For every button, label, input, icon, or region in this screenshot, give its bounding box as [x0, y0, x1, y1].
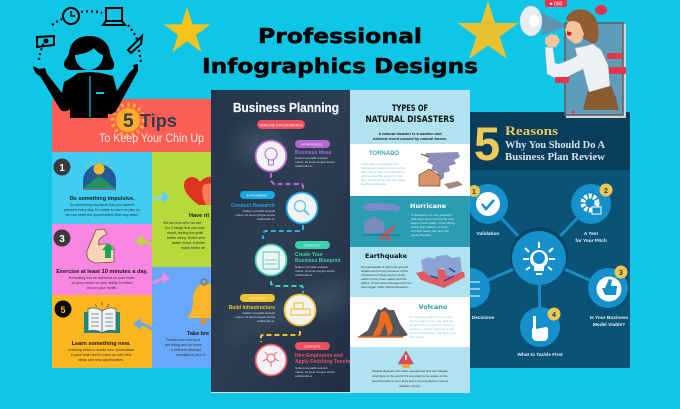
step 2: conduct research: IN PROGRESS: [247, 194, 267, 198]
step 1: business ideas: Nullam convallis suscipit: [295, 156, 328, 160]
title: Professional: [258, 24, 422, 48]
tip 1: [52, 152, 152, 224]
tip 1: Do something impulsive that you haven't: [70, 203, 134, 207]
heading: 5 tips: To Keep Your Chin Up: [99, 133, 204, 145]
section: earthquake: Earthquake: [365, 252, 408, 260]
section: tornado: dangerous rotating column of air: [361, 166, 405, 170]
reason 2: test for pitch: for Your Pitch: [575, 238, 607, 244]
reason 2: test for pitch: [571, 184, 612, 244]
illustration: woman with megaphone on phone: [520, 0, 626, 118]
tip 1: planned every day. It's better to have no plan so: [64, 208, 140, 212]
step 3: business blueprint: Nullam convallis suscipit: [295, 265, 328, 269]
tip 1: Do something impulsive.: [69, 196, 135, 202]
step 3: business blueprint: metus, sit amet congue lectus: [295, 269, 335, 273]
step 4: build infrastructure: metus, sit amet congue lectus: [235, 315, 275, 319]
step 4: build infrastructure: Nullam convallis suscipit: [242, 311, 275, 315]
reason 3: model viable: Model Viable?: [593, 322, 625, 328]
section: hurricane: Hurricane: [410, 202, 447, 210]
step 2: conduct research: Nullam convallis suscipit: [242, 209, 275, 213]
section: earthquake: also trigger other natural disasters.: [361, 285, 409, 289]
section: earthquake: plates. It can cause damage and can: [361, 281, 412, 285]
reason 3: model viable: Is Your Business: [590, 315, 629, 321]
icon: warning sign: [398, 351, 414, 368]
step 1: business ideas: metus, sit amet congue lectus: [295, 160, 335, 164]
heading: 5 reasons: Business Plan Review: [505, 152, 605, 163]
heading: 5 reasons: Reasons: [505, 123, 558, 138]
reason 3: model viable: [588, 266, 629, 328]
heading: 5 tips: Tips: [140, 111, 177, 131]
tip 3: on your mood, on your ability to reflect: [72, 281, 132, 285]
tip 2: make better de: [181, 246, 205, 250]
reason 5: decisions: Decisions: [472, 315, 495, 321]
section: hurricane: A hurricane is a very powerful: [411, 213, 452, 217]
tip 5: [52, 295, 152, 368]
tip 4: Prevent burnout by st: [166, 338, 200, 342]
section: earthquake: movement of large pieces of the: [361, 273, 405, 277]
section: volcano: An volcano eruption is an event: [409, 315, 452, 319]
step 5: hire employees: Hire Employees and: [295, 353, 343, 359]
tip 5: 5: [60, 305, 66, 315]
closing note: [372, 369, 448, 388]
step 1: business ideas: [256, 140, 335, 172]
section: hurricane: cause flooding.: [411, 233, 432, 237]
reason 4: what to tackle first: What to Tackle First: [517, 352, 563, 358]
section: tornado: and touches the ground. It has: [361, 174, 403, 178]
step 5: hire employees: sollicitudin et.: [295, 374, 313, 378]
tip 2: Do 3 things that you love: [165, 226, 205, 230]
step 4: build infrastructure: sollicitudin et.: [257, 319, 275, 323]
tip 5: ideas and new opportunities.: [78, 358, 124, 362]
section: tornado: that comes from a thunderstorm: [361, 170, 405, 174]
step 5: hire employees: COMPLETE: [304, 344, 320, 348]
reason 1: validation: [468, 184, 508, 237]
reason 2: test for pitch: 2: [604, 188, 608, 195]
tip 4: a different atmospl: [171, 348, 201, 352]
tip 2: We are less who we are: [163, 221, 201, 225]
step 4: build infrastructure: COMPLETE: [249, 296, 265, 300]
step 2: conduct research: [231, 191, 318, 224]
heading: 5 tips: 5: [123, 111, 134, 132]
tip 2: Have rit: [189, 213, 209, 219]
step 5: hire employees: Apply Finishing Touches: [295, 359, 354, 365]
hub: lightbulb: [510, 227, 568, 285]
tip 2: result, feeling the gratif: [167, 231, 203, 235]
section: volcano: Volcano: [419, 303, 448, 311]
tip 4: novelties in your d: [176, 353, 205, 357]
timeline label: [257, 120, 305, 129]
section: volcano: escapes from a volcano. When a: [409, 323, 454, 327]
heading: A natural disaster is a sudden and: [378, 131, 442, 136]
tip 3: Exercising has an influence on your brain,: [69, 276, 135, 280]
timeline label: TIMELINE INFOGRAPHICS: [259, 124, 304, 128]
reason 1: validation: Validation: [477, 231, 499, 237]
tip 3: and on your health.: [87, 286, 117, 290]
step 2: conduct research: Conduct Research: [231, 203, 275, 209]
section: volcano: where molten rock, ash, and gas: [409, 319, 454, 323]
section: earthquake: [361, 252, 465, 289]
tip 2: better mood. A better: [172, 241, 206, 245]
section: tornado: A tornado is a powerful and: [361, 162, 399, 166]
tip 4: are doing and do some: [165, 343, 202, 347]
step 5: hire employees: metus, sit amet congue lectus: [295, 370, 335, 374]
panel: 5 tips: [52, 99, 218, 368]
tip 2: better sleep. Better slee: [167, 236, 205, 240]
section: tornado: TORNADO: [369, 151, 399, 157]
step 2: conduct research: sollicitudin et.: [257, 217, 275, 221]
step 4: build infrastructure: Build Infrastructure: [229, 305, 275, 311]
section: volcano: [350, 297, 470, 347]
section: hurricane: [350, 196, 470, 247]
dashed connectors: [261, 173, 303, 342]
panel: 5 reasons: [450, 112, 630, 368]
title: Infographics Designs: [202, 54, 478, 78]
star: right: [458, 1, 518, 59]
section: volcano: ash clouds.: [409, 335, 425, 339]
step 5: hire employees: Nullam convallis suscipit: [295, 366, 328, 370]
star: left: [164, 7, 210, 52]
heading: 5 reasons: [474, 117, 605, 170]
title: [202, 24, 478, 78]
reason 2: test for pitch: A Test: [584, 231, 598, 237]
section: hurricane: warm ocean water. It has strong: [411, 221, 455, 225]
step 3: business blueprint: COMPLETE: [304, 244, 320, 248]
reason 3: model viable: 3: [619, 270, 623, 277]
section: earthquake: shakes and moves because of the: [361, 269, 408, 273]
tip 4: [152, 267, 217, 368]
heading: 5 reasons: 5: [474, 117, 500, 170]
tip 1: we can seize the opportunities that may arise.: [66, 213, 138, 217]
tip 3: 3: [59, 234, 65, 245]
step 3: business blueprint: Business Blueprint: [295, 258, 341, 264]
closing note: Natural disasters are often unexpected and can happen: [372, 369, 448, 373]
arrows between tips: [133, 191, 170, 330]
section: tornado: significant damage.: [361, 182, 388, 186]
icon: woman juggling tasks: [33, 8, 142, 118]
section: earthquake: An earthquake is when the ground: [361, 265, 408, 269]
reason 1: validation: 1: [472, 189, 476, 196]
tip 2: [152, 152, 218, 267]
panel: business planning: [211, 90, 354, 393]
tip 5: Learning helps to create new connections: [68, 348, 134, 352]
heading: NATURAL DISASTERS: [366, 115, 454, 125]
section: earthquake: earth's crust, have called tectonic: [361, 277, 407, 281]
step 3: business blueprint: Create Your: [295, 252, 323, 258]
tip 3: Exercise at least 10 minutes a day.: [56, 269, 148, 275]
section: volcano: cause earthquakes, and fires, and: [409, 331, 456, 335]
reason 4: what to tackle first: 4: [552, 312, 556, 319]
section: hurricane: and large storm that forms over: [411, 217, 454, 221]
section: tornado: very strong winds that can cause: [361, 178, 406, 182]
connector lines: [470, 204, 608, 327]
tip 5: Learn something new.: [72, 341, 131, 347]
step 1: business ideas: sollicitudin et.: [295, 164, 313, 168]
tip 4: Take bre: [187, 331, 209, 337]
reason 4: what to tackle first: [517, 307, 563, 358]
reason 5: decisions: [450, 268, 495, 321]
tip 1: 1: [59, 163, 65, 174]
section: volcano: volcanic eruption happens, it can: [409, 327, 454, 331]
heading: [366, 104, 454, 141]
step 3: business blueprint: [256, 241, 341, 277]
tip 5: in your brain and to come up with new: [71, 353, 132, 357]
section: hurricane: winds that rotate in a circle,: [411, 225, 449, 229]
illustration: woman with megaphone on phone: ♥ 000: [550, 2, 563, 8]
section: hurricane: it brings heavy rain and can: [411, 229, 449, 233]
panel: natural disasters: [350, 90, 470, 393]
tip 3: [52, 224, 152, 295]
step 3: business blueprint: sollicitudin et.: [295, 273, 313, 277]
step 4: build infrastructure: [229, 294, 316, 326]
heading: TYPES OF: [392, 104, 428, 114]
section: tornado: [350, 144, 470, 196]
closing note: potential risks in your area and to be prepared in case a: [372, 379, 448, 383]
step 2: conduct research: metus, sit amet congue lectus: [235, 213, 275, 217]
heading: extreme event caused by natural forces.: [373, 136, 447, 141]
heading: Business Planning: [233, 101, 339, 115]
step 1: business ideas: Business Ideas: [295, 150, 332, 156]
heading: 5 reasons: Why You Should Do A: [505, 140, 605, 151]
closing note: disaster occurs.: [399, 384, 421, 388]
closing note: anywhere in the world. It's important to be aware of the: [372, 374, 448, 378]
step 5: hire employees: [256, 342, 354, 378]
heading: 5 tips: [99, 104, 204, 145]
step 1: business ideas: IN PROGRESS: [302, 142, 322, 146]
